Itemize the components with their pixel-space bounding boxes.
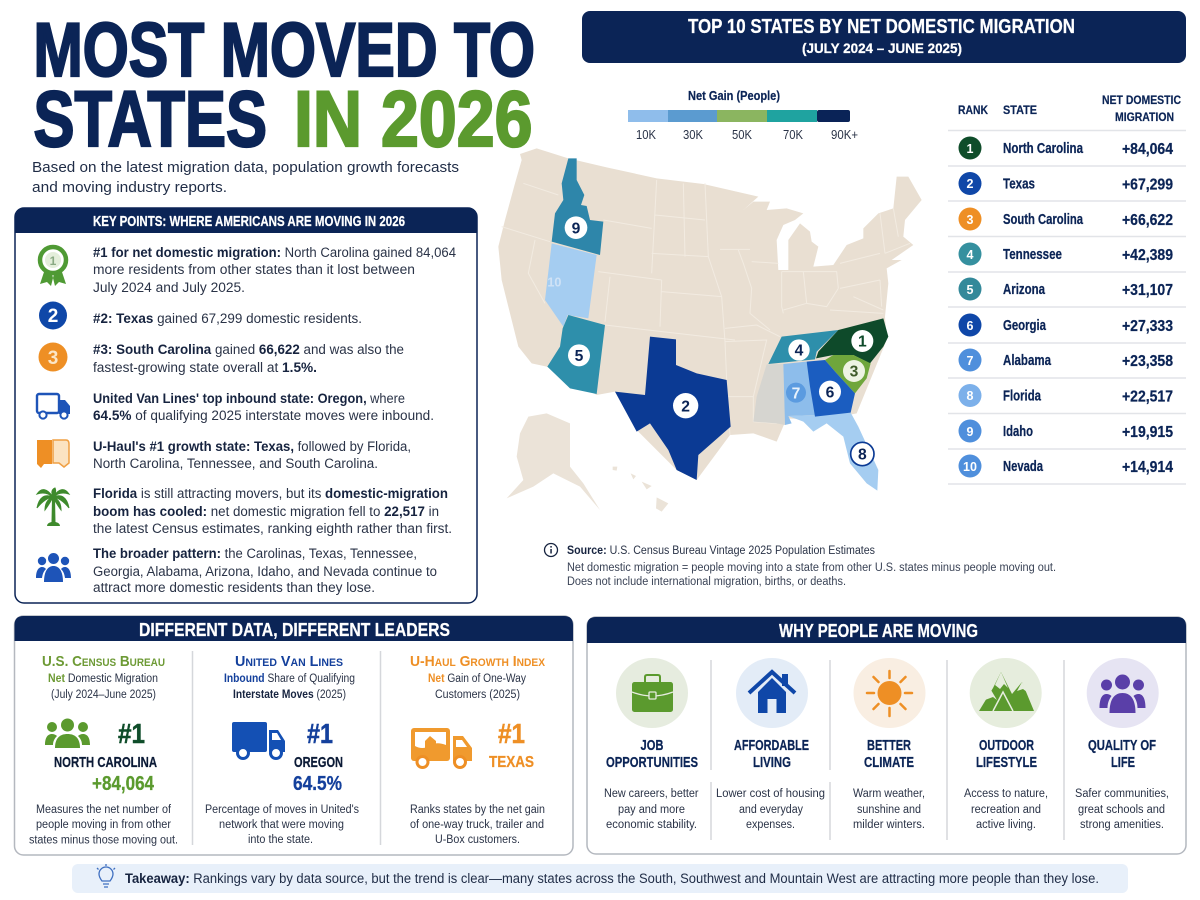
reason: quality of life: strong amenities. [1080,819,1164,831]
column: united van lines: network that were moving [219,819,344,831]
column: u-haul: Customers (2025) [435,689,520,701]
column: census bureau: U.S. Census Bureau [42,653,165,670]
reason: affordable living: and everyday [739,804,803,816]
state: tennessee [768,330,838,364]
map label: 6: 6 [826,384,835,401]
reason: affordable living [716,658,825,831]
icon: mountains [979,672,1034,711]
state: nevada [545,243,597,327]
map label: 6 [819,381,841,403]
column: u-haul: U-Box customers. [435,834,520,846]
row 5: +31,107 [1122,282,1173,299]
column: u-haul: TEXAS [489,754,534,771]
row 9: Idaho [1003,424,1033,440]
column: united van lines: into the state. [248,834,313,846]
map label: 1 [851,330,873,352]
table header: NET DOMESTIC [1102,93,1181,107]
text: south carolina point: #3: South Carolina gained 66,622 and was also the [93,342,404,357]
text: united van lines point [93,391,434,423]
icon: house [749,672,795,713]
legend: net gain: 70K [783,128,804,142]
state: georgia [807,360,855,417]
state: north carolina [816,318,888,363]
column: census bureau: Net Domestic Migration [48,673,158,685]
icon: people group green [45,718,90,748]
state: idaho [552,158,603,255]
heading: key points: KEY POINTS: WHERE AMERICANS ARE MOVING IN 2026 [93,214,405,230]
reason: job opportunities: economic stability. [606,819,697,831]
text: north carolina point: July 2024 and July 2025. [93,280,245,295]
reason: outdoor lifestyle: LIFESTYLE [976,755,1037,771]
row 5: Arizona [1003,282,1046,298]
row 1 [958,136,1173,160]
row 1: 1 [967,142,974,156]
text: south carolina point [93,342,404,375]
map: alaska [507,413,600,510]
text: florida point [93,486,452,536]
reason: quality of life: QUALITY OF [1088,738,1156,754]
reason: outdoor lifestyle [964,658,1048,831]
row 2: 2 [967,177,974,191]
reason: better climate: CLIMATE [864,755,914,771]
row 8: +22,517 [1122,388,1173,406]
column: united van lines: OREGON [294,754,343,771]
column: u-haul: U-Haul Growth Index [410,653,546,670]
row 9: +19,915 [1122,424,1173,441]
legend: net gain: 90K+ [831,128,858,142]
legend: net gain: Net Gain (People) [688,89,780,103]
heading: top 10 states [582,11,1186,63]
row 3 [958,208,1173,230]
legend: net gain: 10K [636,128,657,142]
reason: affordable living: expenses. [746,819,795,831]
row 9: 9 [967,425,974,439]
reason: better climate [853,658,926,831]
column: u-haul: of one-way truck, trailer and [410,819,544,831]
title: MOST MOVED TO [34,8,535,93]
row 5 [958,278,1173,300]
text: broader pattern point [93,546,437,595]
row 3: South Carolina [1003,212,1084,228]
map label: 8: 8 [858,447,867,464]
map label: 3: 3 [850,364,859,381]
map label: 1: 1 [858,334,867,351]
icon: rank 3 badge: 3 [48,348,58,369]
callout: takeaway: Takeaway: Rankings vary by data source, but the trend is clear—many states across the South, Southwest and Mountain West are attracting more people than they lose. [125,871,1099,886]
reason: quality of life [1075,658,1169,831]
reason: better climate: BETTER [867,738,911,754]
table header: STATE [1003,103,1037,117]
callout: takeaway [72,864,1128,893]
map label: 4: 4 [795,343,804,360]
text: united van lines point: 64.5% of qualifying 2025 interstate moves were inbound. [93,408,434,423]
column: united van lines [205,653,359,846]
source note: Net domestic migration = people moving into a state from other U.S. states minus people moving out. [567,562,1056,574]
panel: why people are moving [587,617,1186,854]
icon: rank 3 badge [38,342,68,372]
reason: outdoor lifestyle: active living. [976,819,1036,831]
reason: job opportunities: pay and more [618,804,685,816]
reason: quality of life: LIFE [1111,755,1135,771]
row 7 [958,348,1173,372]
text: broader pattern point: Georgia, Alabama, Arizona, Idaho, and Nevada continue to [93,564,437,579]
row 5: 5 [967,283,974,297]
text: florida point: the latest Census estimates, ranking eighth rather than first. [93,521,452,536]
panel: key points [15,208,477,603]
row 10: +14,914 [1122,459,1173,476]
column: census bureau: +84,064 [92,773,155,795]
row 7: 7 [967,354,974,368]
text: south carolina point: fastest-growing state overall at 1.5%. [93,360,317,375]
column: u-haul: #1 [498,718,525,749]
map: mississippi [753,364,785,425]
reason: outdoor lifestyle: OUTDOOR [979,738,1034,754]
icon: palm tree [37,488,69,526]
state: south carolina [825,355,871,393]
map label: 3 [843,360,865,382]
column: united van lines: United Van Lines [235,653,343,670]
column: united van lines: Interstate Moves (2025) [233,689,346,701]
column: u-haul: Ranks states by the net gain [410,804,545,816]
row 6 [958,314,1173,336]
text: north carolina point: #1 for net domestic migration: North Carolina gained 84,064 [93,245,456,260]
row 6: Georgia [1003,318,1047,334]
row 6: +27,333 [1122,318,1173,335]
row 1: North Carolina [1003,141,1084,157]
text: united van lines point: United Van Lines' top inbound state: Oregon, where [93,391,405,406]
icon: blue truck [232,722,285,758]
map label: 10: 10 [547,276,561,290]
row 9 [958,420,1173,442]
row 6: 6 [967,319,974,333]
text: north carolina point: more residents from other states than it lost between [93,262,415,277]
subtitle: and moving industry reports. [32,179,227,196]
subtitle: Based on the latest migration data, population growth forecasts [32,159,459,176]
map label: 8 [851,442,874,466]
legend: net gain: 50K [732,128,753,142]
icon: light bulb [97,864,115,887]
map label: 9 [565,216,587,239]
reason: job opportunities: JOB [640,738,664,754]
table header [958,93,1181,124]
icon: people group purple [1100,674,1146,713]
icon: people group [36,553,71,582]
map: hawaii [613,467,668,512]
map: united states [498,148,922,512]
reason: better climate: milder winters. [853,819,925,831]
icon: rank 2 badge [39,302,67,330]
text: broader pattern point: The broader pattern: the Carolinas, Texas, Tennessee, [93,546,417,561]
row 8: Florida [1003,388,1042,404]
icon: info [544,544,558,556]
text: north carolina point [93,245,456,295]
row 3: +66,622 [1122,212,1173,229]
column: census bureau: states minus those moving out. [29,834,178,846]
icon: u-haul box [37,440,69,468]
column: u-haul: Net Gain of One-Way [428,673,526,685]
reason: outdoor lifestyle: recreation and [971,804,1041,816]
column: u-haul [410,653,546,846]
row 1: +84,064 [1122,141,1173,158]
column: census bureau: people moving in from other [36,819,171,831]
column: united van lines: Inbound Share of Qualifying [224,673,355,685]
text: texas point: #2: Texas gained 67,299 domestic residents. [93,311,362,326]
heading: different data: DIFFERENT DATA, DIFFERENT LEADERS [139,620,450,640]
map label: 5 [568,344,590,366]
icon: green medal: 1 [50,254,57,268]
heading: top 10 states: (JULY 2024 – JUNE 2025) [802,41,962,56]
row 4: 4 [967,248,974,262]
map label: 4 [788,339,810,361]
row 8: 8 [967,389,974,403]
icon: moving truck [37,394,70,419]
column: census bureau: (July 2024–June 2025) [51,689,156,701]
reason: affordable living: LIVING [753,755,791,771]
map label: 2: 2 [681,398,690,415]
state: texas [615,337,731,480]
text: u-haul point [93,439,411,471]
state: florida [788,413,878,491]
heading: why people are moving: WHY PEOPLE ARE MOVING [779,621,978,641]
reason: affordable living: AFFORDABLE [734,738,809,754]
source note: Does not include international migration, births, or deaths. [567,576,846,588]
reason: job opportunities: New careers, better [604,788,699,800]
row 4: +42,389 [1122,247,1173,264]
reason: quality of life: Safer communities, [1075,788,1169,800]
row 4 [958,242,1173,266]
text: broader pattern point: attract more domestic residents than they lose. [93,580,375,595]
map label: 2 [673,393,698,418]
column: census bureau: Measures the net number of [36,804,172,816]
map: land base [498,148,922,480]
column: census bureau: NORTH CAROLINA [54,754,157,771]
subtitle [32,159,459,196]
reason: better climate: sunshine and [857,804,921,816]
text: florida point: Florida is still attracting movers, but its domestic-migration [93,486,448,501]
row 3: 3 [967,213,974,227]
column: united van lines: 64.5% [293,773,342,795]
map label: 9: 9 [572,220,581,237]
column: census bureau: #1 [118,718,145,749]
row 7: +23,358 [1122,353,1173,370]
table header: RANK [958,103,988,117]
table: top 10 states [948,93,1186,484]
icon: rank 2 badge: 2 [48,306,58,327]
text: florida point: boom has cooled: net domestic migration fell to 22,517 in [93,504,439,519]
title [34,8,535,163]
text: u-haul point: U-Haul's #1 growth state: Texas, followed by Florida, [93,439,411,454]
icon: briefcase [632,675,673,712]
reason: job opportunities: OPPORTUNITIES [606,755,698,771]
row 4: Tennessee [1003,247,1062,263]
row 7: Alabama [1003,353,1052,369]
source note [544,544,1056,588]
icon: green medal [40,247,66,286]
row 2: +67,299 [1122,176,1173,194]
reason: affordable living: Lower cost of housing [716,788,825,800]
map label: 7: 7 [792,385,801,402]
column: united van lines: #1 [307,718,333,749]
row 10: Nevada [1003,459,1044,475]
text: u-haul point: North Carolina, Tennessee, and South Carolina. [93,456,378,471]
row 8 [958,384,1173,407]
map: state borders [502,180,910,435]
source note: Source: U.S. Census Bureau Vintage 2025 Population Estimates [567,545,875,557]
legend: net gain [628,89,858,142]
row 2 [958,172,1173,195]
row 10: 10 [963,460,977,474]
reason: quality of life: great schools and [1078,804,1165,816]
title: STATES [34,74,267,163]
table header: MIGRATION [1115,110,1174,124]
reason: outdoor lifestyle: Access to nature, [964,788,1048,800]
icon: sun [867,671,912,716]
reason: better climate: Warm weather, [853,788,925,800]
column: census bureau [29,653,178,846]
column: united van lines: Percentage of moves in United's [205,804,359,816]
icon: orange truck [411,728,472,768]
state: arizona [547,315,605,394]
reason: job opportunities [604,658,699,831]
state: alabama [783,362,815,425]
title: IN 2026 [294,74,532,163]
panel: different data, different leaders [14,616,573,855]
heading: top 10 states: TOP 10 STATES BY NET DOMESTIC MIGRATION [688,16,1075,38]
row 2: Texas [1003,176,1035,192]
map label: 7 [786,383,806,403]
map label: 5: 5 [575,348,584,365]
legend: net gain: 30K [683,128,704,142]
row 10 [958,454,1173,478]
